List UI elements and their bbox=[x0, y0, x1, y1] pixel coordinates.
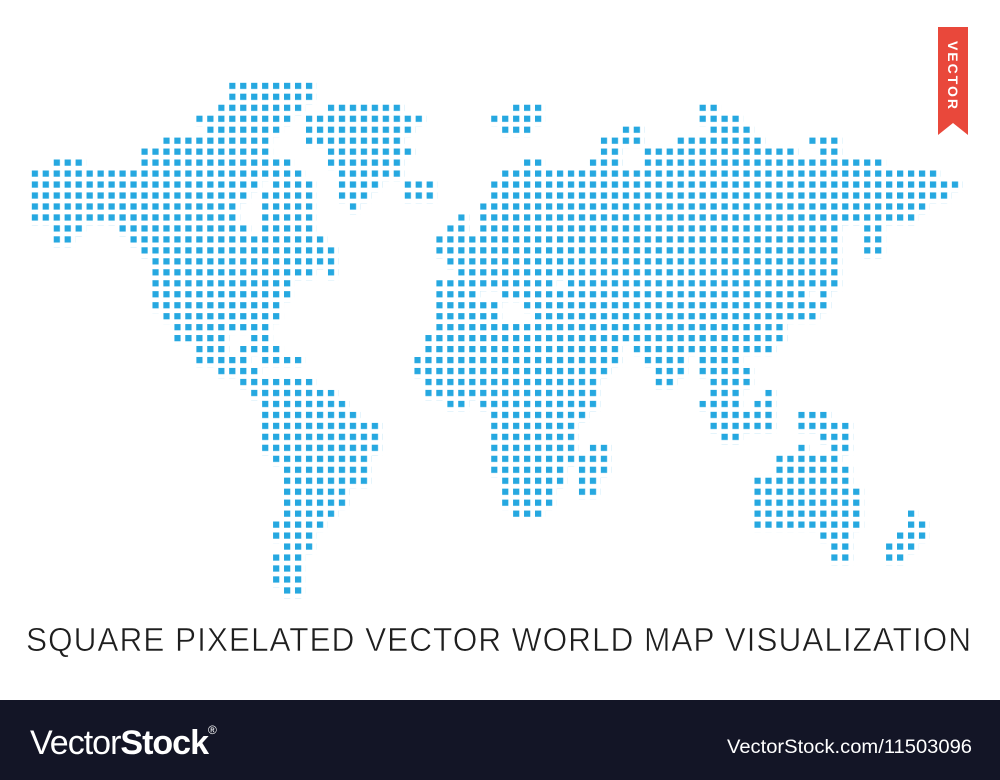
footer logo: VectorStock bbox=[30, 724, 208, 762]
ribbon: vector badge bbox=[938, 27, 968, 135]
title: SQUARE PIXELATED VECTOR WORLD MAP VISUALIZATION bbox=[26, 621, 972, 658]
ribbon: vector badge: VECTOR bbox=[945, 41, 961, 111]
footer bar bbox=[0, 700, 1000, 780]
footer url: VectorStock.com/11503096 bbox=[727, 737, 972, 758]
map: americas and greenland bbox=[32, 83, 438, 598]
map: europe, asia, africa, australia bbox=[414, 105, 963, 565]
footer logo: ® bbox=[208, 723, 217, 737]
